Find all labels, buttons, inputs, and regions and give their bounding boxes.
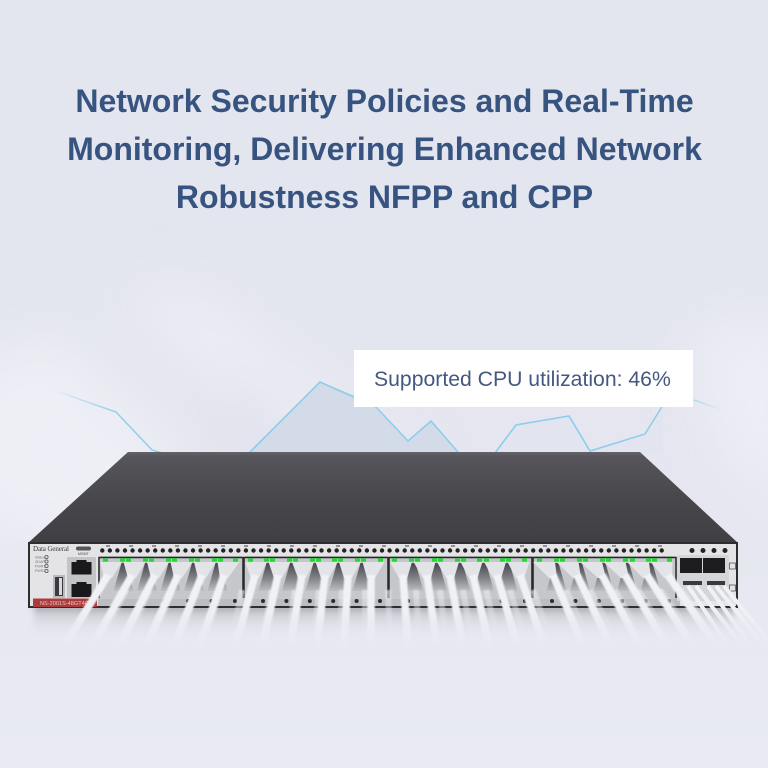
lower row cables [102, 590, 722, 640]
SFP cables [688, 586, 768, 648]
port screw holes [118, 599, 676, 603]
brand and status labels: PWR1 [35, 564, 45, 568]
Ethernet port groups [99, 556, 676, 599]
SFP cages [677, 555, 736, 601]
red model strip [33, 598, 97, 607]
brand and status labels: Data General [33, 545, 69, 553]
switch top cover [28, 452, 738, 543]
brand and status labels: MGMT [78, 552, 90, 556]
RJ45 console ports [67, 557, 96, 598]
USB port [53, 575, 65, 598]
brand and status labels: PWR2 [35, 569, 45, 573]
title: Robustness NFPP and CPP [176, 179, 593, 215]
brand and status labels [33, 545, 91, 573]
switch device [28, 452, 768, 648]
green link LEDs [103, 558, 672, 562]
title [67, 83, 702, 215]
title: Monitoring, Delivering Enhanced Network [67, 131, 702, 167]
top row cables [63, 575, 718, 648]
title: Network Security Policies and Real-Time [75, 83, 694, 119]
switch front panel [28, 542, 738, 608]
brand and status labels: Status [35, 556, 45, 560]
shadow under switch [34, 604, 734, 638]
brand and status labels: SDAP [35, 560, 45, 564]
red model strip: NS-2001S-48GT4Q [40, 601, 90, 607]
callout: CPU utilization: Supported CPU utilization: 46% [374, 368, 671, 391]
port separators [114, 563, 660, 591]
callout: CPU utilization [354, 350, 693, 407]
port indicator dots [102, 546, 726, 550]
line chart: CPU utilization [53, 382, 722, 454]
RJ45 plug bodies [100, 562, 672, 578]
